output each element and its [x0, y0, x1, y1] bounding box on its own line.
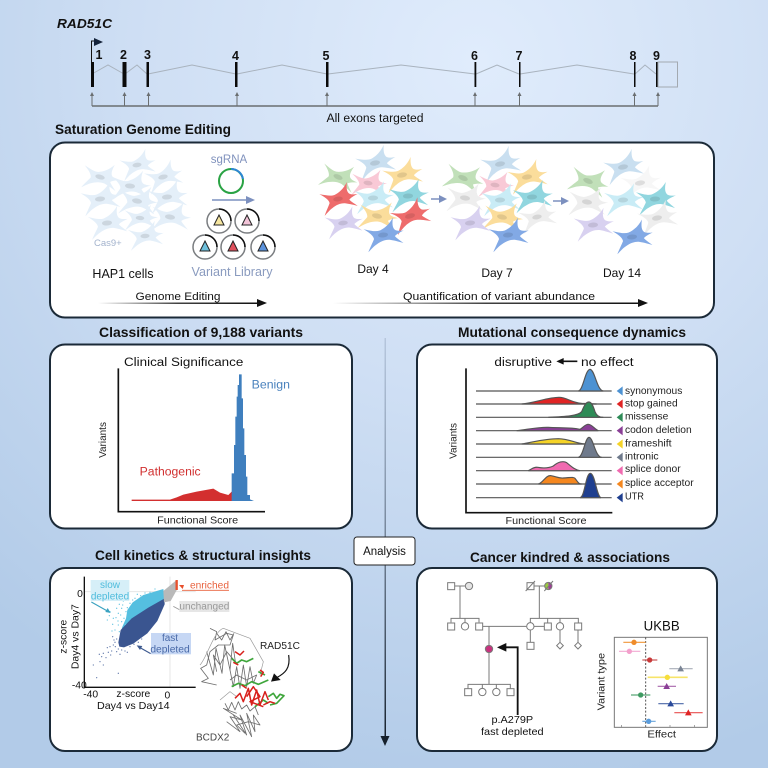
grey subunits [201, 628, 260, 737]
gene title: RAD51C [57, 16, 113, 31]
arrow: proband [497, 643, 518, 715]
cells: day 14 [565, 147, 680, 254]
exon numbers: 6 [471, 49, 478, 63]
y axis label: Variant type [596, 653, 607, 710]
exon numbers: 4 [232, 49, 239, 63]
label: benign: Benign [252, 378, 290, 392]
exon numbers: 8 [630, 49, 637, 63]
axis labels: -40 [83, 690, 98, 701]
legend: splice donor [625, 464, 681, 475]
x axis label: Functional Score [157, 515, 239, 526]
target bracket with arrows [90, 92, 660, 106]
legend: frameshift [625, 439, 672, 450]
axis labels: z-score [116, 689, 151, 700]
chart title: UKBB: UKBB [644, 617, 680, 633]
exon numbers: 5 [323, 49, 330, 63]
heading: cell kinetics: Cell kinetics & structural insights [95, 547, 311, 563]
analysis box: Analysis [363, 546, 406, 558]
label: Variant Library: Variant Library [192, 265, 273, 279]
legend: codon deletion [625, 425, 692, 436]
label: slow depleted: depleted [91, 591, 129, 602]
legend: synonymous [625, 386, 682, 397]
label: pathogenic: Pathogenic [140, 464, 201, 478]
scatter plot [84, 577, 196, 687]
pedigree [448, 581, 582, 696]
axis labels: z-score [59, 619, 70, 654]
gene model: RAD51C exons [91, 38, 678, 87]
red RAD51C regions [233, 651, 275, 707]
exon numbers [96, 48, 660, 63]
affected grandmother [544, 581, 553, 591]
exon numbers: 1 [96, 48, 103, 62]
proband [485, 645, 493, 653]
label: fast depleted: depleted [150, 645, 190, 656]
label: all exons targeted: All exons targeted [326, 113, 424, 125]
label: slow depleted: slow [100, 580, 121, 591]
exon numbers: 7 [516, 49, 523, 63]
arrow: genome editing [98, 299, 267, 307]
analysis box [354, 537, 415, 565]
dark scatter [93, 637, 142, 678]
green RAD51C regions [232, 658, 284, 707]
label: p.A279P fast depleted: fast depleted [481, 727, 544, 738]
arrow: RAD51C [271, 655, 289, 682]
axis labels: Day4 vs Day7 [71, 604, 82, 669]
icon: variant library plasmids [193, 209, 275, 259]
panel: cell kinetics [50, 568, 352, 751]
cells: day 7 [440, 144, 559, 252]
y axis label: Variants [449, 423, 460, 459]
cells: day 4 [316, 143, 434, 252]
header: disruptive to no effect: disruptive [494, 355, 552, 369]
panel: saturation genome editing [50, 142, 714, 318]
heading: saturation genome editing: Saturation Genome Editing [55, 121, 231, 137]
label: fast depleted [137, 633, 191, 656]
exon numbers: 3 [144, 48, 151, 62]
label: unchanged: unchanged [179, 601, 229, 612]
enriched marks [173, 580, 180, 590]
label: fast depleted: fast [162, 633, 178, 644]
axes [84, 577, 196, 687]
axis labels [59, 589, 170, 712]
fast depleted band [118, 598, 165, 647]
y axis label: Variants [98, 422, 109, 458]
protein structure: BCDX2 complex [200, 628, 284, 737]
pathogenic distribution [132, 489, 234, 501]
heading: classification: Classification of 9,188 variants [99, 324, 303, 340]
benign distribution [232, 374, 254, 501]
x axis label: Effect [647, 730, 676, 741]
heading: mutational consequence: Mutational consequence dynamics [458, 324, 686, 340]
header: disruptive to no effect: no effect [581, 355, 634, 369]
label: Cas9+: Cas9+ [94, 238, 122, 249]
label: p.A279P fast depleted: p.A279P [491, 715, 533, 726]
unchanged region [163, 580, 177, 602]
arrow: day 4 to day 7 [431, 195, 447, 203]
3 prime UTR box [658, 62, 678, 87]
label: quantification: Quantification of variant abundance [403, 291, 595, 303]
ridges [476, 369, 612, 498]
label: Genome Editing: Genome Editing [136, 291, 220, 303]
icon: sgRNA plasmid [219, 169, 243, 193]
HAP1 cells cluster [79, 148, 193, 251]
axis labels: 0 [164, 690, 170, 701]
chart: clinical significance histogram [98, 355, 290, 526]
legend [617, 386, 694, 503]
exons [91, 62, 658, 87]
header: disruptive to no effect [494, 355, 634, 369]
arrow: quantification [333, 299, 648, 307]
panel: cancer kindred [417, 568, 717, 751]
label: Day 14: Day 14 [603, 266, 641, 280]
forest plot [614, 637, 707, 727]
panel: mutational consequence ridgeline [417, 344, 717, 528]
legend: intronic [625, 452, 659, 463]
label: RAD51C: RAD51C [260, 641, 301, 652]
arrow: day 7 to day 14 [553, 197, 569, 205]
axis labels: 0 [77, 589, 83, 600]
x axis label: Functional Score [505, 516, 587, 527]
exon numbers: 2 [120, 48, 127, 62]
introns [92, 65, 656, 74]
legend: missense [625, 412, 669, 423]
label: p.A279P fast depleted [481, 715, 544, 738]
label: sgRNA: sgRNA [211, 154, 248, 166]
label: slow depleted [91, 580, 129, 613]
panel: classification histogram [50, 344, 352, 528]
axis labels: -40 [72, 680, 87, 691]
chart: ridgeline plot [449, 355, 694, 527]
label: enriched: enriched [190, 581, 229, 592]
axes [466, 368, 612, 513]
legend: stop gained [625, 398, 678, 409]
legend: UTR [625, 492, 644, 503]
arrow: transduction [212, 196, 255, 204]
light scatter [107, 589, 155, 632]
legend: splice acceptor [625, 478, 694, 489]
label: Day 4: Day 4 [357, 262, 389, 276]
axis labels: Day4 vs Day14 [97, 701, 170, 712]
analysis timeline arrow [380, 338, 390, 746]
heading: cancer kindred: Cancer kindred & associations [470, 549, 670, 565]
axes [118, 368, 265, 512]
label: BCDX2: BCDX2 [196, 732, 230, 743]
label: Day 7: Day 7 [481, 266, 513, 280]
chart title: Clinical Significance [124, 355, 243, 369]
label: HAP1 cells: HAP1 cells [92, 267, 154, 281]
transcription start flag [92, 41, 96, 62]
exon numbers: 9 [653, 49, 660, 63]
slow depleted band [122, 589, 165, 632]
